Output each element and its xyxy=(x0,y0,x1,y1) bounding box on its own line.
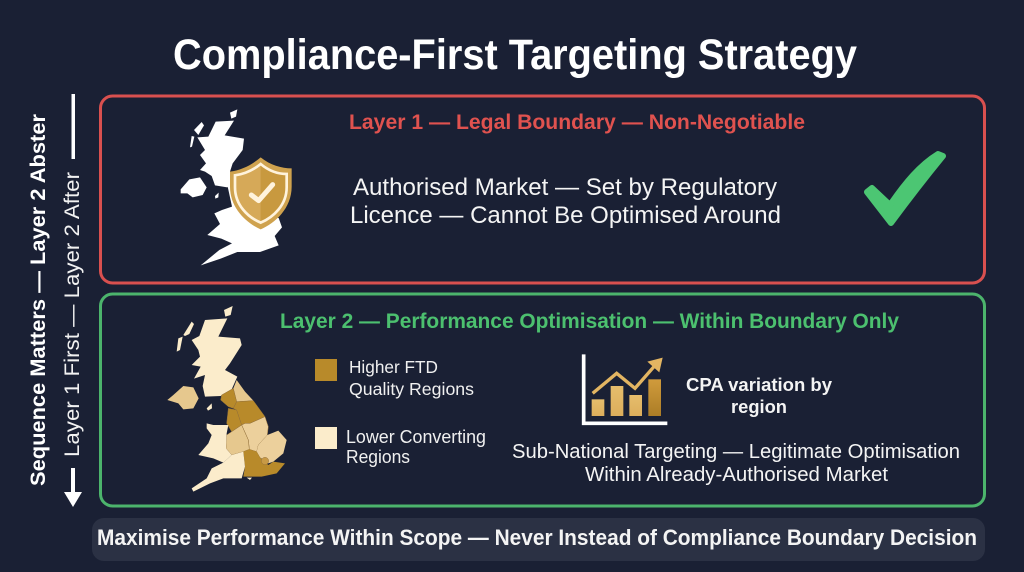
icon: green check mark xyxy=(867,154,943,223)
chart caption: region xyxy=(731,396,787,417)
panel: layer 1 legal boundary xyxy=(100,96,984,283)
map: UK regions xyxy=(167,306,287,492)
side label: sequence matters xyxy=(26,94,84,486)
legend: higher FTD quality regions xyxy=(315,357,474,399)
legend: higher FTD quality regions: Quality Regions xyxy=(349,379,474,399)
sub-national targeting text: Within Already-Authorised Market xyxy=(585,464,888,486)
sub-national targeting text: Sub-National Targeting — Legitimate Optimisation xyxy=(512,441,960,463)
legend: lower converting regions xyxy=(315,427,486,467)
layer 1 body text: Authorised Market — Set by Regulatory xyxy=(353,174,777,201)
legend: lower converting regions: Regions xyxy=(346,447,410,467)
sub-national targeting text xyxy=(512,441,960,486)
chart caption xyxy=(686,374,833,417)
bottom banner: Maximise Performance Within Scope — Never Instead of Compliance Boundary Decision xyxy=(97,525,977,550)
layer 1 body text: Licence — Cannot Be Optimised Around xyxy=(350,202,781,229)
shield xyxy=(230,157,292,229)
legend: higher FTD quality regions: Higher FTD xyxy=(349,357,438,377)
title: Compliance-First Targeting Strategy xyxy=(173,31,857,79)
layer 1 body text xyxy=(350,174,781,229)
chart caption: CPA variation by xyxy=(686,374,833,395)
side label: sequence matters: Layer 1 First — Layer 2 After xyxy=(61,172,84,457)
icon: bar chart with rising arrow xyxy=(584,354,667,423)
legend: lower converting regions: Lower Converting xyxy=(346,427,486,447)
arrow: downward sequence xyxy=(64,468,82,507)
panel: layer 2 performance optimisation xyxy=(100,294,984,506)
icon: UK map with shield xyxy=(181,109,292,265)
layer 2 heading: Layer 2 — Performance Optimisation — Within Boundary Only xyxy=(280,310,899,333)
UK white map xyxy=(181,109,282,265)
bottom banner xyxy=(92,518,985,561)
layer 1 heading: Layer 1 — Legal Boundary — Non-Negotiable xyxy=(349,111,805,134)
side label: sequence matters: Sequence Matters — Layer 2 Abster xyxy=(26,113,50,486)
